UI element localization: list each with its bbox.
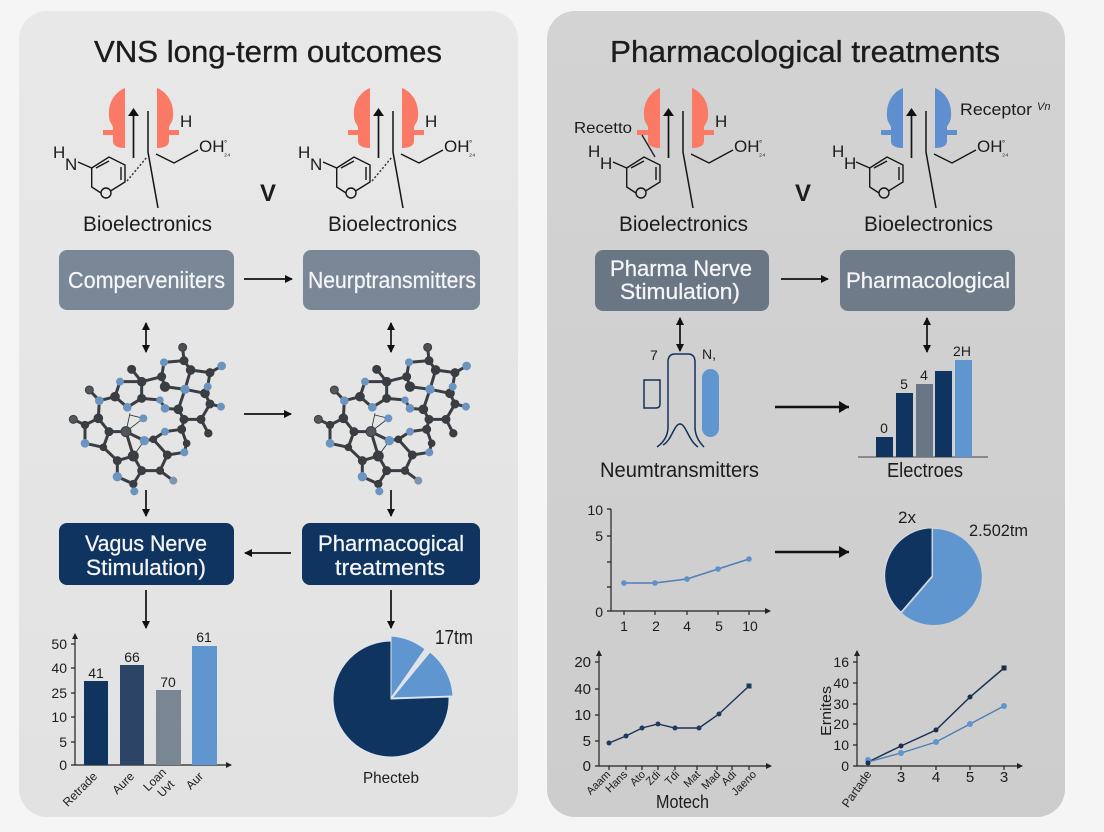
line chart: two series Ernites: 0 bbox=[841, 758, 849, 774]
arrow: down left bbox=[145, 490, 147, 516]
line chart: Motech: Ato bbox=[628, 769, 648, 789]
line chart: two series Ernites: 16 bbox=[833, 654, 849, 670]
versus letter right: V bbox=[795, 180, 811, 207]
bar chart: 40 bbox=[51, 660, 67, 676]
arrow: Comperveniiters to Neurptransmitters bbox=[244, 278, 292, 280]
box: Comperveniiters bbox=[59, 250, 234, 310]
arrow: nerve to bars bbox=[775, 406, 849, 408]
line chart: single series: 1 bbox=[620, 618, 628, 634]
bar chart: 0 bbox=[59, 757, 67, 773]
line chart: Motech: Tdi bbox=[663, 769, 682, 788]
panel background right bbox=[547, 11, 1065, 817]
molecule diagram 3: ° bbox=[759, 139, 762, 148]
box: Pharmacogical treatments: treatments bbox=[335, 555, 445, 580]
heading: VNS long-term outcomes: VNS long-term outcomes bbox=[94, 34, 442, 69]
small bar chart: Electroes bbox=[858, 343, 988, 482]
molecule diagram 4: OH bbox=[977, 137, 1002, 156]
molecule diagram 1: ° bbox=[224, 139, 227, 148]
line chart: Motech: Adi bbox=[719, 769, 739, 788]
pie chart: 2x and 2.502tm bbox=[885, 508, 1028, 625]
line chart: two series Ernites: 20 bbox=[833, 716, 849, 732]
molecule structure 2 bbox=[314, 343, 471, 495]
arrow: structure to structure bbox=[244, 413, 291, 415]
molecule diagram 1: H bbox=[53, 143, 65, 162]
icon: nerve tube with electrode: N, bbox=[702, 346, 716, 362]
molecule diagram 1: OH bbox=[199, 137, 224, 156]
molecule diagram 2: H bbox=[425, 112, 437, 131]
molecule diagram 4: Receptor bbox=[960, 100, 1032, 119]
arrow: down right bbox=[390, 490, 392, 516]
bar chart: Aure bbox=[109, 769, 137, 797]
box: Comperveniiters: Comperveniiters bbox=[68, 267, 225, 293]
pie chart: 2x and 2.502tm: 2.502tm bbox=[969, 521, 1028, 540]
box: Pharmacological: Pharmacological bbox=[846, 268, 1010, 293]
panel: VNS long-term outcomes bbox=[19, 11, 518, 817]
panel: Pharmacological treatments bbox=[547, 11, 1065, 817]
line chart: Motech: Mat bbox=[682, 769, 703, 790]
line chart: two series Ernites: 5 bbox=[966, 769, 974, 786]
line chart: single series: 2 bbox=[652, 618, 660, 634]
panel background left bbox=[19, 11, 518, 817]
molecule diagram 2: ° bbox=[469, 139, 472, 148]
arrow: two-way to nerve icon bbox=[679, 318, 681, 351]
arrow: two-way left column bbox=[145, 323, 147, 352]
molecule diagram 3 bbox=[574, 88, 765, 236]
small bar chart: Electroes: 2H bbox=[953, 343, 971, 359]
small bar chart: Electroes: Electroes bbox=[887, 460, 963, 482]
line chart: two series Ernites bbox=[818, 651, 1022, 810]
small bar chart: Electroes: 5 bbox=[900, 376, 908, 392]
molecule diagram 3: H bbox=[588, 142, 600, 161]
bar chart: Retrade bbox=[60, 769, 100, 809]
line chart: single series: 10 bbox=[587, 502, 603, 518]
molecule diagram 4 bbox=[832, 88, 1050, 236]
line chart: Motech: 20 bbox=[574, 654, 591, 671]
heading: Pharmacological treatments: Pharmacological treatments bbox=[610, 34, 1000, 69]
box: Pharma Nerve Stimulation: Stimulation) bbox=[620, 279, 740, 304]
line chart: single series: 10 bbox=[742, 618, 758, 634]
icon: nerve tube with electrode bbox=[600, 346, 759, 482]
line chart: two series Ernites: Partade bbox=[839, 767, 875, 810]
molecule diagram 3: ₂₄ bbox=[759, 149, 765, 158]
box: Vagus Nerve Stimulation bbox=[59, 523, 234, 585]
molecule diagram 1: N bbox=[65, 155, 77, 174]
molecule diagram 4: ₂₄ bbox=[1002, 149, 1008, 158]
icon: nerve tube with electrode: Neumtransmitters bbox=[600, 459, 759, 482]
line chart: single series: 0 bbox=[595, 604, 603, 620]
molecule diagram 4: H bbox=[832, 142, 844, 161]
bar chart: Uvt bbox=[154, 777, 178, 800]
arrow: down to pie chart bbox=[390, 590, 392, 628]
line chart: two series Ernites: 40 bbox=[833, 675, 849, 691]
molecule diagram 2: ₂₄ bbox=[469, 149, 475, 158]
molecule diagram 1: Bioelectronics bbox=[83, 213, 212, 236]
molecule diagram 3: OH bbox=[734, 137, 760, 156]
molecule diagram 2: N bbox=[310, 155, 322, 174]
line chart: two series Ernites: 10 bbox=[833, 737, 849, 753]
line chart: two series Ernites: 3 bbox=[1000, 769, 1008, 786]
versus letter left: V bbox=[260, 180, 276, 207]
pie chart bbox=[333, 627, 473, 787]
bar chart: 70 bbox=[160, 674, 176, 690]
box: Pharmacogical treatments: Pharmacogical bbox=[318, 531, 464, 556]
molecule diagram 4: Vn bbox=[1037, 101, 1050, 113]
molecule diagram 3: H bbox=[600, 154, 612, 173]
line chart: two series Ernites: Ernites bbox=[818, 686, 835, 736]
arrow: Pharmacogical to Vagus bbox=[245, 552, 291, 554]
arrow: line chart to pie bbox=[775, 551, 849, 553]
molecule diagram 2: OH bbox=[444, 137, 470, 156]
line chart: Motech: 5 bbox=[583, 733, 591, 750]
arrow: two-way to electrode bars bbox=[926, 318, 928, 352]
arrow: two-way right column bbox=[390, 323, 392, 352]
molecule diagram 2 bbox=[298, 88, 475, 236]
molecule diagram 4: Bioelectronics bbox=[864, 213, 993, 236]
bar chart: 50 bbox=[51, 636, 67, 652]
line chart: Motech: 40 bbox=[574, 681, 591, 698]
molecule structure 1 bbox=[69, 343, 226, 495]
box: Neurptransmitters: Neurptransmitters bbox=[308, 267, 476, 293]
molecule diagram 3: Recetto bbox=[574, 120, 632, 137]
line chart: Motech: Mad bbox=[699, 769, 723, 792]
box: Vagus Nerve Stimulation: Vagus Nerve bbox=[85, 531, 207, 556]
molecule diagram 4: H bbox=[844, 154, 856, 173]
bar chart: 25 bbox=[51, 685, 67, 701]
line chart: single series bbox=[587, 502, 770, 634]
bar chart: Loan bbox=[140, 765, 169, 794]
small bar chart: Electroes: 4 bbox=[920, 367, 928, 383]
line chart: single series: 4 bbox=[683, 618, 691, 634]
pie chart: 17tm bbox=[435, 627, 473, 649]
molecule diagram 1: ₂₄ bbox=[224, 149, 230, 158]
bar chart bbox=[51, 629, 231, 809]
line chart: two series Ernites: 3 bbox=[897, 769, 905, 786]
arrow: Pharma to Pharmacological bbox=[781, 278, 828, 280]
box: Pharmacological bbox=[840, 250, 1015, 311]
small bar chart: Electroes: 0 bbox=[880, 420, 888, 436]
line chart: Motech: Aaam bbox=[584, 769, 613, 797]
icon: nerve tube with electrode: 7 bbox=[650, 347, 658, 363]
molecule diagram 1: H bbox=[180, 112, 192, 131]
molecule diagram 1 bbox=[53, 88, 230, 236]
bar chart: Aur bbox=[183, 769, 206, 792]
molecule diagram 3: H bbox=[715, 112, 727, 131]
bar chart: 5 bbox=[59, 734, 67, 750]
arrow: down to bar chart bbox=[145, 590, 147, 628]
box: Vagus Nerve Stimulation: Stimulation) bbox=[86, 555, 206, 580]
molecule diagram 2: Bioelectronics bbox=[328, 213, 457, 236]
box: Neurptransmitters bbox=[303, 250, 480, 310]
box: Pharma Nerve Stimulation bbox=[595, 250, 769, 311]
line chart: single series: 5 bbox=[595, 528, 603, 544]
molecule diagram 3: Bioelectronics bbox=[619, 213, 748, 236]
box: Pharmacogical treatments bbox=[302, 523, 480, 585]
line chart: Motech: Hans bbox=[603, 768, 630, 795]
line chart: Motech: Motech bbox=[656, 792, 709, 812]
molecule diagram 2: H bbox=[298, 143, 310, 162]
line chart: Motech bbox=[574, 651, 771, 812]
line chart: two series Ernites: 30 bbox=[833, 696, 849, 712]
line chart: single series: 5 bbox=[715, 618, 723, 634]
bar chart: 41 bbox=[88, 665, 104, 681]
line chart: Motech: Jaeno bbox=[729, 769, 759, 798]
line chart: two series Ernites: 4 bbox=[932, 769, 940, 786]
line chart: Motech: Zdi bbox=[644, 769, 663, 788]
box: Pharma Nerve Stimulation: Pharma Nerve bbox=[610, 256, 752, 281]
bar chart: 66 bbox=[124, 649, 140, 665]
line chart: Motech: 0 bbox=[583, 758, 591, 775]
pie chart: Phecteb bbox=[363, 770, 419, 787]
bar chart: 10 bbox=[51, 709, 67, 725]
line chart: Motech: 10 bbox=[574, 707, 591, 724]
molecule diagram 4: ° bbox=[1002, 139, 1005, 148]
pie chart: 2x and 2.502tm: 2x bbox=[898, 508, 916, 527]
bar chart: 61 bbox=[196, 629, 212, 645]
